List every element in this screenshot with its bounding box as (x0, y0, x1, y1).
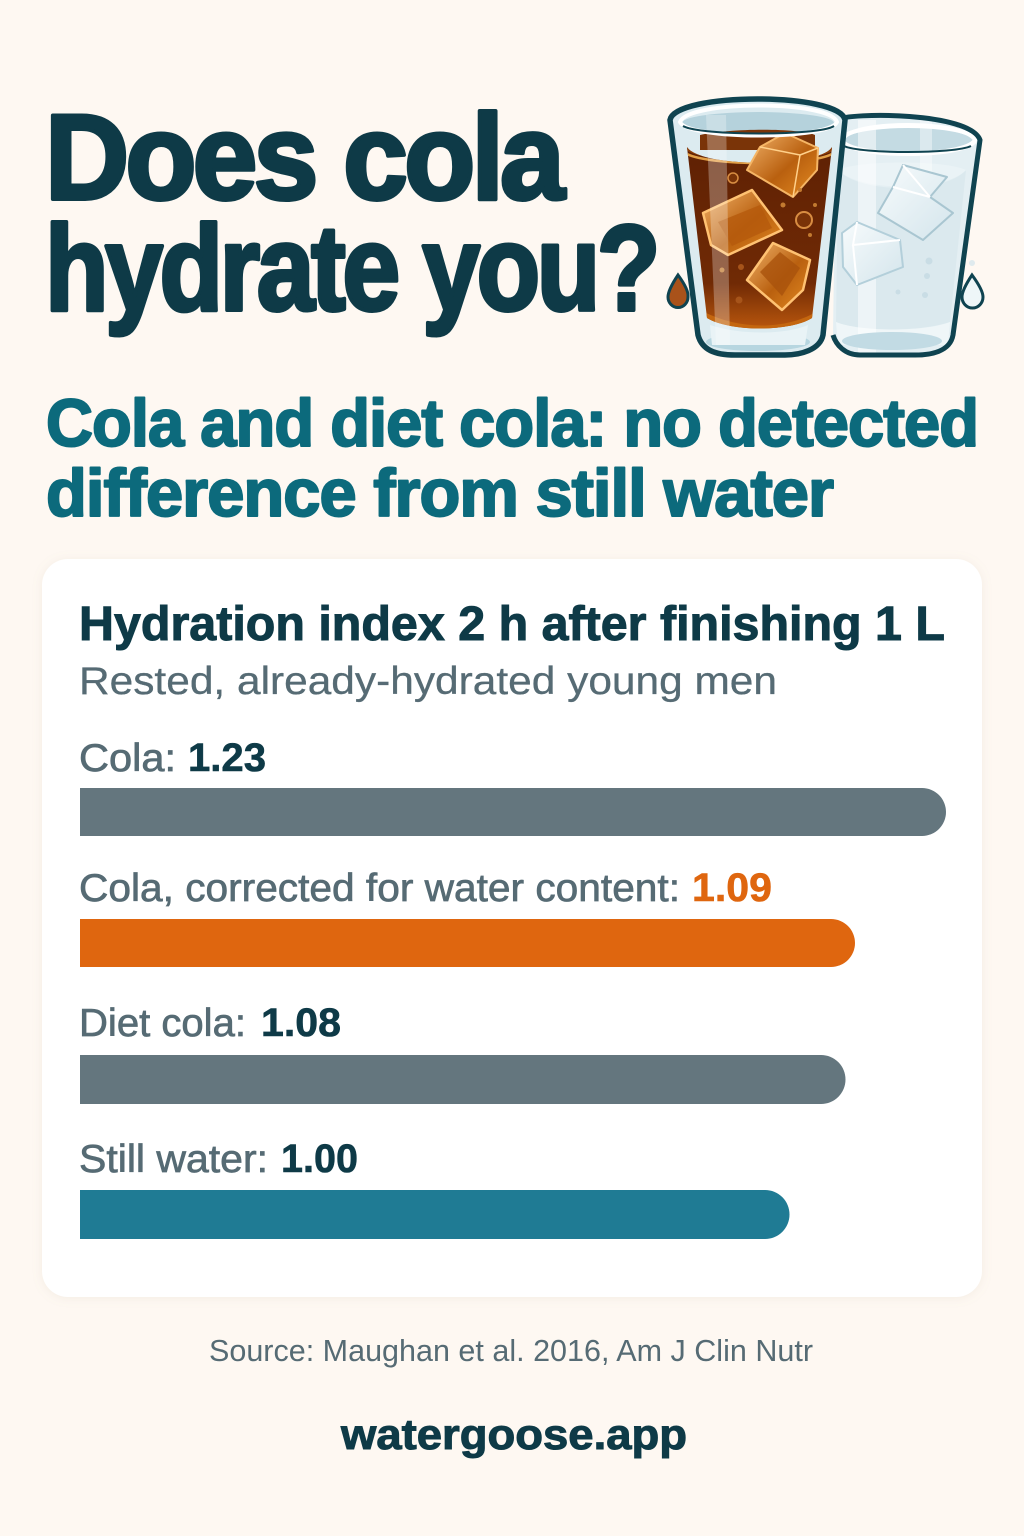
icon: water droplet (962, 275, 983, 308)
chart subheading: Rested, already-hydrated young men (79, 660, 777, 703)
ice cube top (747, 133, 818, 197)
subtitle: difference from still water (46, 456, 834, 531)
title: Does cola (45, 89, 566, 225)
icon: cola glass (668, 99, 845, 355)
row: diet cola: Diet cola: (79, 1002, 246, 1045)
row: cola corrected: Cola, corrected for water content: (79, 867, 680, 910)
row: cola corrected (79, 866, 855, 967)
ice cube lower (842, 222, 903, 285)
ice cube bottom (747, 243, 810, 310)
icon: water glass (833, 115, 983, 355)
icon: cola droplet (668, 275, 688, 308)
website: watergoose.app (340, 1411, 687, 1459)
row: cola: 1.23 (188, 736, 266, 780)
row: diet cola (79, 1001, 846, 1104)
row: cola (79, 736, 946, 836)
row: cola corrected: 1.09 (692, 866, 772, 910)
title (45, 89, 657, 336)
row: still water (79, 1137, 789, 1239)
panel: hydration chart (42, 559, 982, 1297)
subtitle (46, 386, 978, 531)
row: still water: 1.00 (281, 1137, 358, 1181)
chart heading: Hydration index 2 h after finishing 1 L (79, 598, 945, 651)
source: Source: Maughan et al. 2016, Am J Clin Nutr (209, 1333, 813, 1368)
title: hydrate you? (45, 200, 657, 336)
ice cube middle (703, 190, 782, 255)
subtitle: Cola and diet cola: no detected (46, 386, 978, 461)
row: diet cola: 1.08 (261, 1001, 341, 1045)
row: cola: Cola: (79, 737, 176, 780)
ice cube upper (878, 165, 953, 240)
row: still water: Still water: (79, 1138, 268, 1181)
icon: glasses of cola and water (668, 99, 983, 355)
